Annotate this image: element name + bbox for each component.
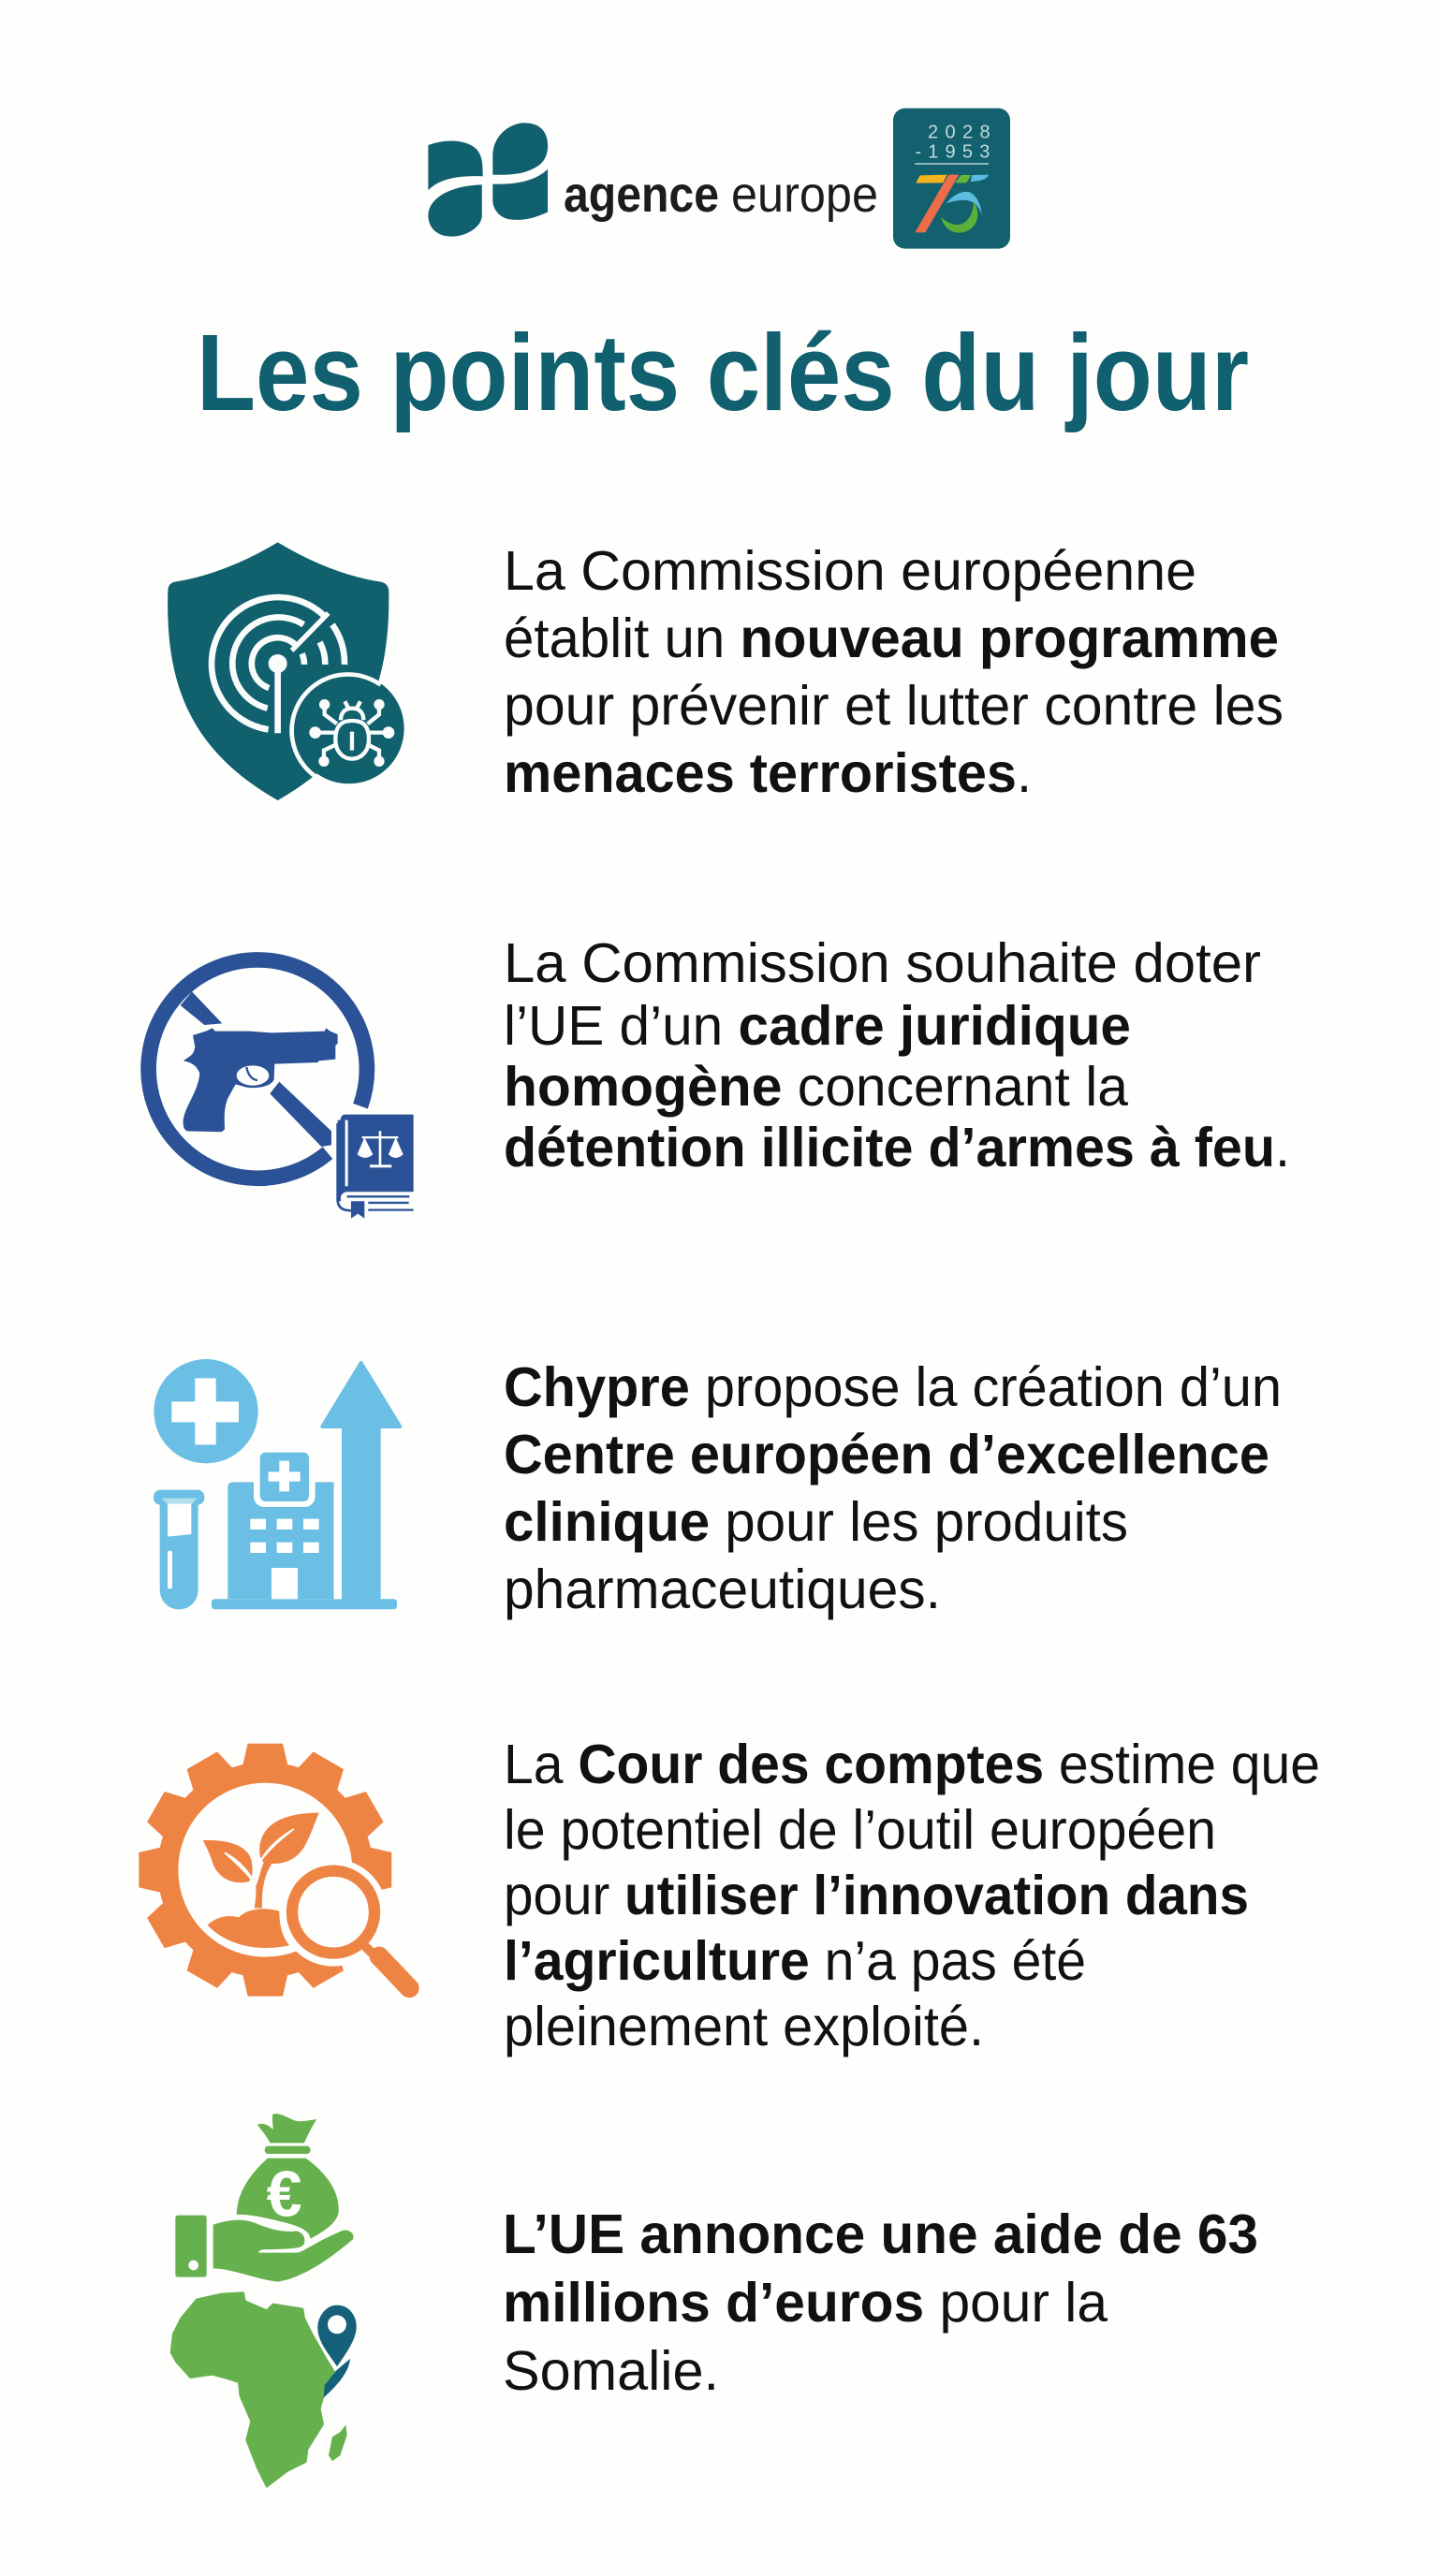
text block 4: l’agriculture n’a pas été [504, 1930, 1086, 1992]
text block 1: menaces terroristes. [504, 742, 1032, 804]
panel: point 2 armes a feu [149, 932, 1290, 1220]
text block 4: pleinement exploité. [504, 1996, 984, 2057]
panel: point 1 terrorisme [168, 540, 1284, 804]
text block 3: Centre européen d’excellence [504, 1424, 1269, 1486]
icon: money bag in hand over Africa map: € [267, 2159, 302, 2230]
icon: money bag in hand over Africa map [171, 2114, 358, 2487]
text block 1: La Commission européenne [504, 540, 1196, 602]
text block 5: millions d’euros pour la [503, 2272, 1108, 2334]
logo wordmark: agence [564, 167, 719, 223]
panel: point 4 Cour des comptes [139, 1734, 1320, 2057]
panel: point 5 Somalie [171, 2114, 1258, 2487]
text block 3: Chypre propose la création d’un [504, 1356, 1282, 1418]
icon: shield radar bug [168, 542, 404, 800]
text block 1: pour prévenir et lutter contre les [504, 675, 1284, 737]
text block 5: Somalie. [503, 2340, 719, 2402]
anniversary badge [893, 109, 1010, 249]
logo wordmark: europe [731, 167, 878, 223]
text block 2: détention illicite d’armes à feu. [504, 1117, 1290, 1178]
title: Les points clés du jour [197, 312, 1249, 433]
text block 2 [504, 932, 1290, 1178]
text block 4 [504, 1734, 1320, 2057]
text block 2: homogène concernant la [504, 1056, 1128, 1118]
text block 4: pour utiliser l’innovation dans [504, 1865, 1249, 1926]
logo wordmark [564, 167, 878, 223]
anniversary badge: -1953 [915, 141, 990, 162]
text block 2: l’UE d’un cadre juridique [504, 995, 1131, 1057]
text block 4: le potentiel de l’outil européen [504, 1799, 1216, 1861]
text block 1 [504, 540, 1284, 804]
text block 2: La Commission souhaite doter [504, 932, 1261, 994]
panel: point 3 Chypre [154, 1356, 1282, 1620]
text block 4: La Cour des comptes estime que [504, 1734, 1320, 1795]
icon: prohibited gun with law book [149, 959, 417, 1220]
text block 5: L’UE annonce une aide de 63 [503, 2203, 1258, 2265]
text block 5 [503, 2203, 1258, 2402]
text block 1: établit un nouveau programme [504, 607, 1279, 669]
header logo [428, 109, 1010, 249]
logo mark [428, 123, 548, 237]
text block 3: clinique pour les produits [504, 1491, 1128, 1553]
text block 3: pharmaceutiques. [504, 1559, 941, 1620]
anniversary badge: 2028 [928, 123, 990, 143]
text block 3 [504, 1356, 1282, 1620]
icon: hospital, test tube and rising arrow [154, 1359, 400, 1609]
icon: gear with seedling and magnifier [139, 1744, 429, 1999]
